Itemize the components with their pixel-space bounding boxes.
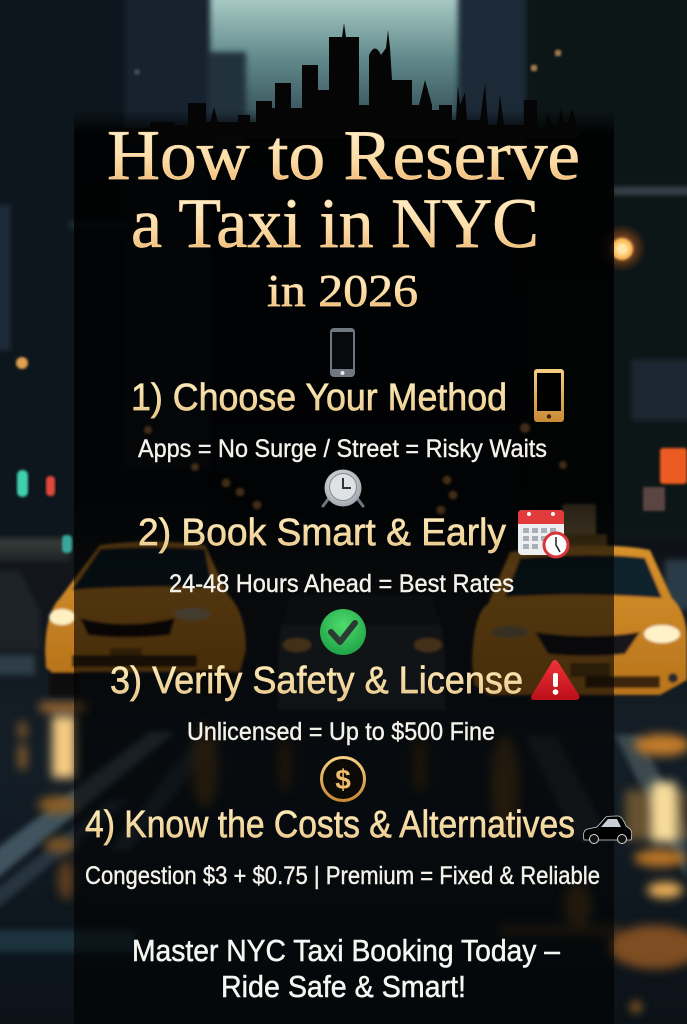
icon: warning triangle	[531, 660, 580, 700]
step 1 detail: Apps = No Surge / Street = Risky Waits	[138, 435, 547, 463]
parked car left	[0, 570, 40, 675]
step 4	[85, 804, 632, 890]
street lights and signals	[16, 50, 687, 553]
closing call to action: Master NYC Taxi Booking Today –	[132, 933, 561, 968]
step 3 detail: Unlicensed = Up to $500 Fine	[187, 718, 495, 746]
step 1 heading: 1) Choose Your Method	[131, 377, 507, 419]
title: a Taxi in NYC	[131, 185, 539, 263]
icon: dollar coin: $	[335, 764, 351, 795]
step 1	[131, 369, 564, 463]
dark translucent centre panel	[74, 110, 614, 1024]
parked car right	[665, 560, 687, 610]
icon: dollar coin	[322, 758, 364, 800]
step 2	[138, 510, 568, 598]
icon: black car	[584, 816, 632, 844]
right taxi	[472, 504, 687, 695]
title	[107, 117, 580, 316]
skyline silhouette	[120, 23, 580, 138]
title: in 2026	[267, 265, 418, 316]
centre car	[278, 595, 445, 710]
closing call to action: Ride Safe & Smart!	[221, 969, 466, 1004]
icon: smartphone, grey	[330, 328, 355, 377]
step 3	[110, 660, 580, 746]
step 4 heading: 4) Know the Costs & Alternatives	[85, 804, 575, 846]
icon: green check	[320, 609, 366, 655]
step 3 heading: 3) Verify Safety & License	[110, 660, 523, 702]
icon: smartphone, gold	[534, 369, 564, 422]
step 2 heading: 2) Book Smart & Early	[138, 512, 506, 554]
step 2 detail: 24-48 Hours Ahead = Best Rates	[169, 570, 514, 598]
icon: alarm clock	[323, 470, 363, 506]
left taxi	[45, 542, 246, 696]
wet road reflections and crosswalk	[0, 703, 687, 1012]
bokeh lights inside panel	[144, 423, 567, 514]
icon: calendar with clock	[518, 510, 568, 557]
step 4 detail: Congestion $3 + $0.75 | Premium = Fixed & Reliable	[85, 862, 600, 890]
closing call to action	[132, 933, 561, 1004]
title: How to Reserve	[107, 117, 580, 195]
